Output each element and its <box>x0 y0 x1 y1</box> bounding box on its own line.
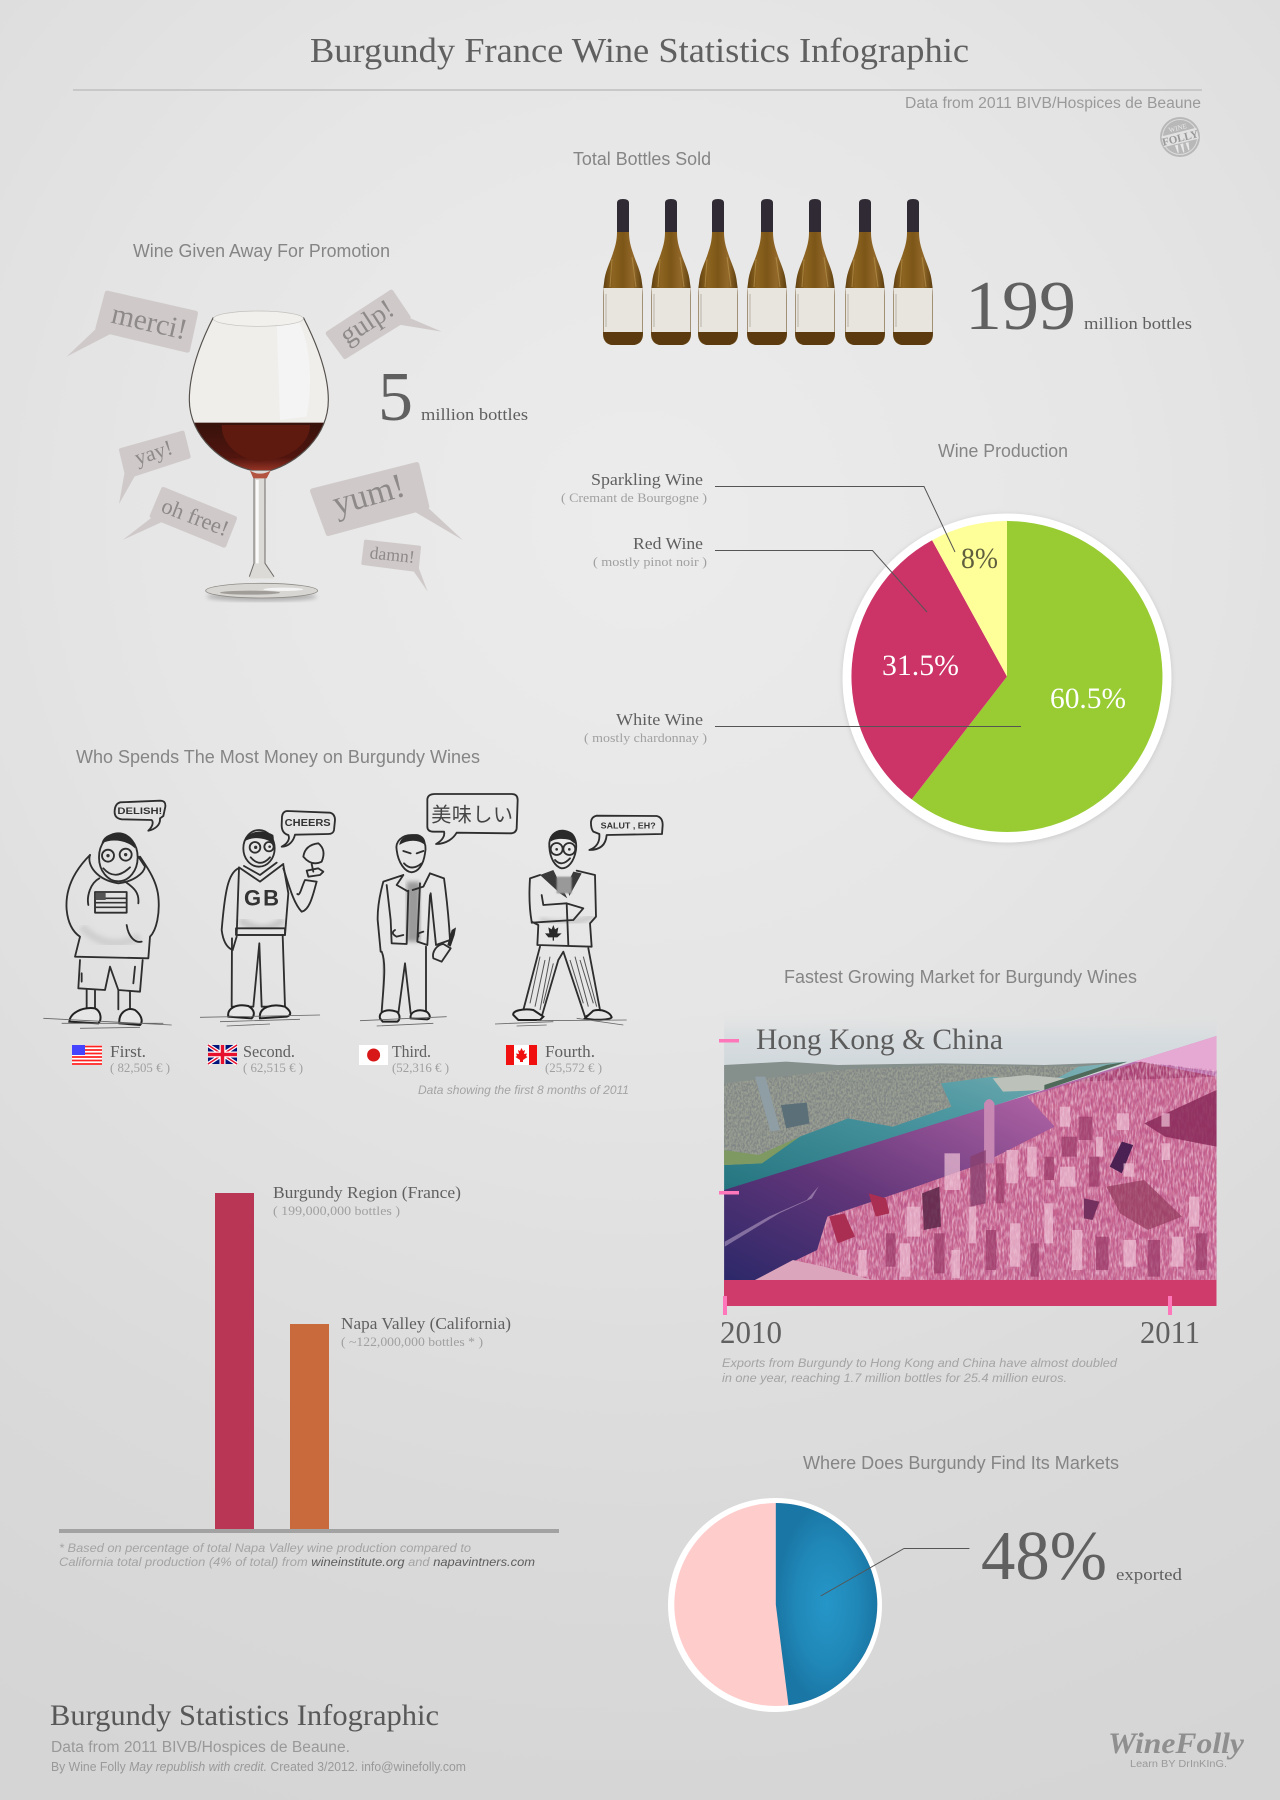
rank: third: Third. <box>392 1042 431 1061</box>
bubble: gulp: gulp! <box>334 292 399 350</box>
flag: usa <box>72 1045 102 1065</box>
stat: 5 million bottles: million bottles <box>421 405 528 424</box>
bubble: damn: damn! <box>369 542 416 567</box>
bubble: gulp <box>328 292 442 357</box>
label: white wine: ( mostly chardonnay ) <box>584 730 707 745</box>
label: sparkling wine: ( Cremant de Bourgogne ) <box>561 490 707 505</box>
label: napa: Napa Valley (California) <box>341 1314 511 1333</box>
source note: Data from 2011 BIVB/Hospices de Beaune <box>905 95 1201 112</box>
label: red wine: Red Wine <box>633 534 703 553</box>
illustration: japanese figure <box>360 794 518 1026</box>
stat: 199 million bottles <box>965 268 1192 345</box>
rank: second: ( 62,515 € ) <box>243 1060 303 1075</box>
stat: 48% exported: 48% <box>981 1518 1107 1595</box>
slice: sparkling wine 8% <box>932 521 1007 676</box>
icon: wine folly badge: FOLLY <box>1161 128 1200 149</box>
label: white wine <box>584 710 1021 745</box>
footer <box>50 1699 466 1774</box>
caption: exports: in one year, reaching 1.7 million bottles for 25.4 million euros. <box>722 1371 1067 1385</box>
section: total bottles sold <box>573 149 1192 345</box>
rank: second <box>243 1042 303 1075</box>
heading: who spends the most: Who Spends The Most Money on Burgundy Wines <box>76 747 480 767</box>
illustration: british figure: CHEERS <box>285 818 331 829</box>
heading: wine production: Wine Production <box>938 441 1068 461</box>
label: hong kong and china: Hong Kong & China <box>756 1023 1003 1056</box>
logo: wine folly: WineFolly <box>1108 1727 1245 1760</box>
flag: japan <box>359 1045 388 1065</box>
caption: exports: Exports from Burgundy to Hong Kong and China have almost doubled <box>722 1356 1117 1370</box>
rank: fourth: (25,572 € ) <box>545 1060 602 1075</box>
timeline bar <box>724 1280 1216 1306</box>
label: sparkling wine: Sparkling Wine <box>591 470 703 489</box>
heading: fastest growing market: Fastest Growing Market for Burgundy Wines <box>784 967 1137 987</box>
bubble: merci: merci! <box>108 298 190 346</box>
stat: 5 million bottles: 5 <box>378 359 413 436</box>
illustration: british figure <box>200 811 335 1026</box>
speech bubbles and wine glass <box>67 292 463 601</box>
rank: third <box>392 1042 449 1075</box>
rank: first: ( 82,505 € ) <box>110 1060 170 1075</box>
bar: burgundy <box>215 1193 254 1529</box>
slice: red wine 31.5% <box>851 540 1007 799</box>
section: fastest growing market <box>719 967 1217 1385</box>
label: napa <box>341 1314 511 1349</box>
icon: wine folly badge: WINE <box>1168 122 1188 134</box>
label: red wine: ( mostly pinot noir ) <box>593 554 707 569</box>
label: napa: ( ~122,000,000 bottles * ) <box>341 1334 483 1349</box>
label: burgundy: Burgundy Region (France) <box>273 1183 461 1202</box>
stat: 199 million bottles: 199 <box>965 268 1076 345</box>
pie chart: exports <box>668 1498 969 1712</box>
label: 2010: 2010 <box>720 1314 782 1350</box>
value: 8%: 8% <box>961 542 998 575</box>
stat: 199 million bottles: million bottles <box>1084 314 1192 333</box>
illustration: american figure: DELISH! <box>117 806 162 816</box>
bubble: yay: yay! <box>131 435 176 470</box>
rank: fourth: Fourth. <box>545 1042 595 1061</box>
icon: seven wine bottles <box>603 199 933 345</box>
logo: wine folly: Learn BY DrInKInG. <box>1130 1759 1227 1770</box>
tick marks <box>719 1039 1172 1315</box>
bubble: damn <box>363 541 428 592</box>
note: first 8 months: Data showing the first 8 months of 2011 <box>418 1083 629 1097</box>
overlay: pink growth area <box>724 1036 1217 1280</box>
section: who spends the most <box>43 747 663 1097</box>
photo: hong kong skyline with pink growth overlay <box>721 1013 1217 1280</box>
bubble: oh free: oh free! <box>158 493 233 541</box>
label: sparkling wine <box>561 470 955 552</box>
section: wine given away <box>67 241 528 601</box>
bubble: merci <box>67 293 195 357</box>
icon: wine glass <box>183 311 333 601</box>
stat: 48% exported <box>981 1518 1183 1595</box>
footer source: Data from 2011 BIVB/Hospices de Beaune. <box>51 1739 350 1756</box>
rank: second: Second. <box>243 1042 295 1061</box>
rank: first <box>110 1042 170 1075</box>
bar chart: burgundy vs napa <box>59 1183 559 1569</box>
bubble: yay <box>119 433 189 504</box>
heading: wine given away: Wine Given Away For Promotion <box>133 241 390 261</box>
label: 2011: 2011 <box>1140 1314 1200 1350</box>
icon: wine folly badge <box>1159 117 1202 157</box>
bubble: oh free <box>123 489 235 545</box>
section: wine production <box>561 441 1172 844</box>
label: white wine: White Wine <box>616 710 703 729</box>
label: burgundy: ( 199,000,000 bottles ) <box>273 1203 400 1218</box>
illustration: british figure: GB <box>244 886 281 911</box>
pie chart: wine production <box>842 514 1172 844</box>
value: 60.5%: 60.5% <box>1050 682 1126 715</box>
rank: first: First. <box>110 1042 146 1061</box>
slice: white wine 60.5% <box>912 521 1162 832</box>
footer title: Burgundy Statistics Infographic <box>50 1699 439 1732</box>
stat: 48% exported: exported <box>1116 1565 1183 1584</box>
section: markets <box>668 1453 1183 1712</box>
illustration: canadian figure: SALUT , EH? <box>601 822 656 831</box>
rank: third: (52,316 € ) <box>392 1060 449 1075</box>
footer credit: By Wine Folly May republish with credit. Created 3/2012. info@winefolly.com <box>51 1760 466 1774</box>
footnote: California total production (4% of total) from wineinstitute.org and napavintners.com <box>59 1555 535 1569</box>
illustration: canadian figure <box>495 816 663 1026</box>
rank: fourth <box>545 1042 602 1075</box>
value: 31.5%: 31.5% <box>882 649 959 682</box>
footnote: * Based on percentage of total Napa Valley wine production compared to <box>59 1541 471 1555</box>
title: Burgundy France Wine Statistics Infographic <box>310 31 969 70</box>
stat: 5 million bottles <box>378 359 528 436</box>
bubble: yum: yum! <box>328 466 409 523</box>
footnote <box>59 1541 535 1569</box>
flag: canada <box>506 1045 537 1065</box>
flag: uk <box>208 1045 237 1064</box>
illustration: american figure <box>43 801 172 1028</box>
heading: total bottles sold: Total Bottles Sold <box>573 149 711 169</box>
bubble: yum <box>313 465 463 540</box>
heading: markets: Where Does Burgundy Find Its Markets <box>803 1453 1119 1473</box>
caption: exports <box>722 1356 1117 1385</box>
label: red wine <box>593 534 927 612</box>
illustration: japanese figure: 美味しい <box>431 804 513 827</box>
label: burgundy <box>273 1183 461 1218</box>
bar: napa <box>290 1324 329 1529</box>
